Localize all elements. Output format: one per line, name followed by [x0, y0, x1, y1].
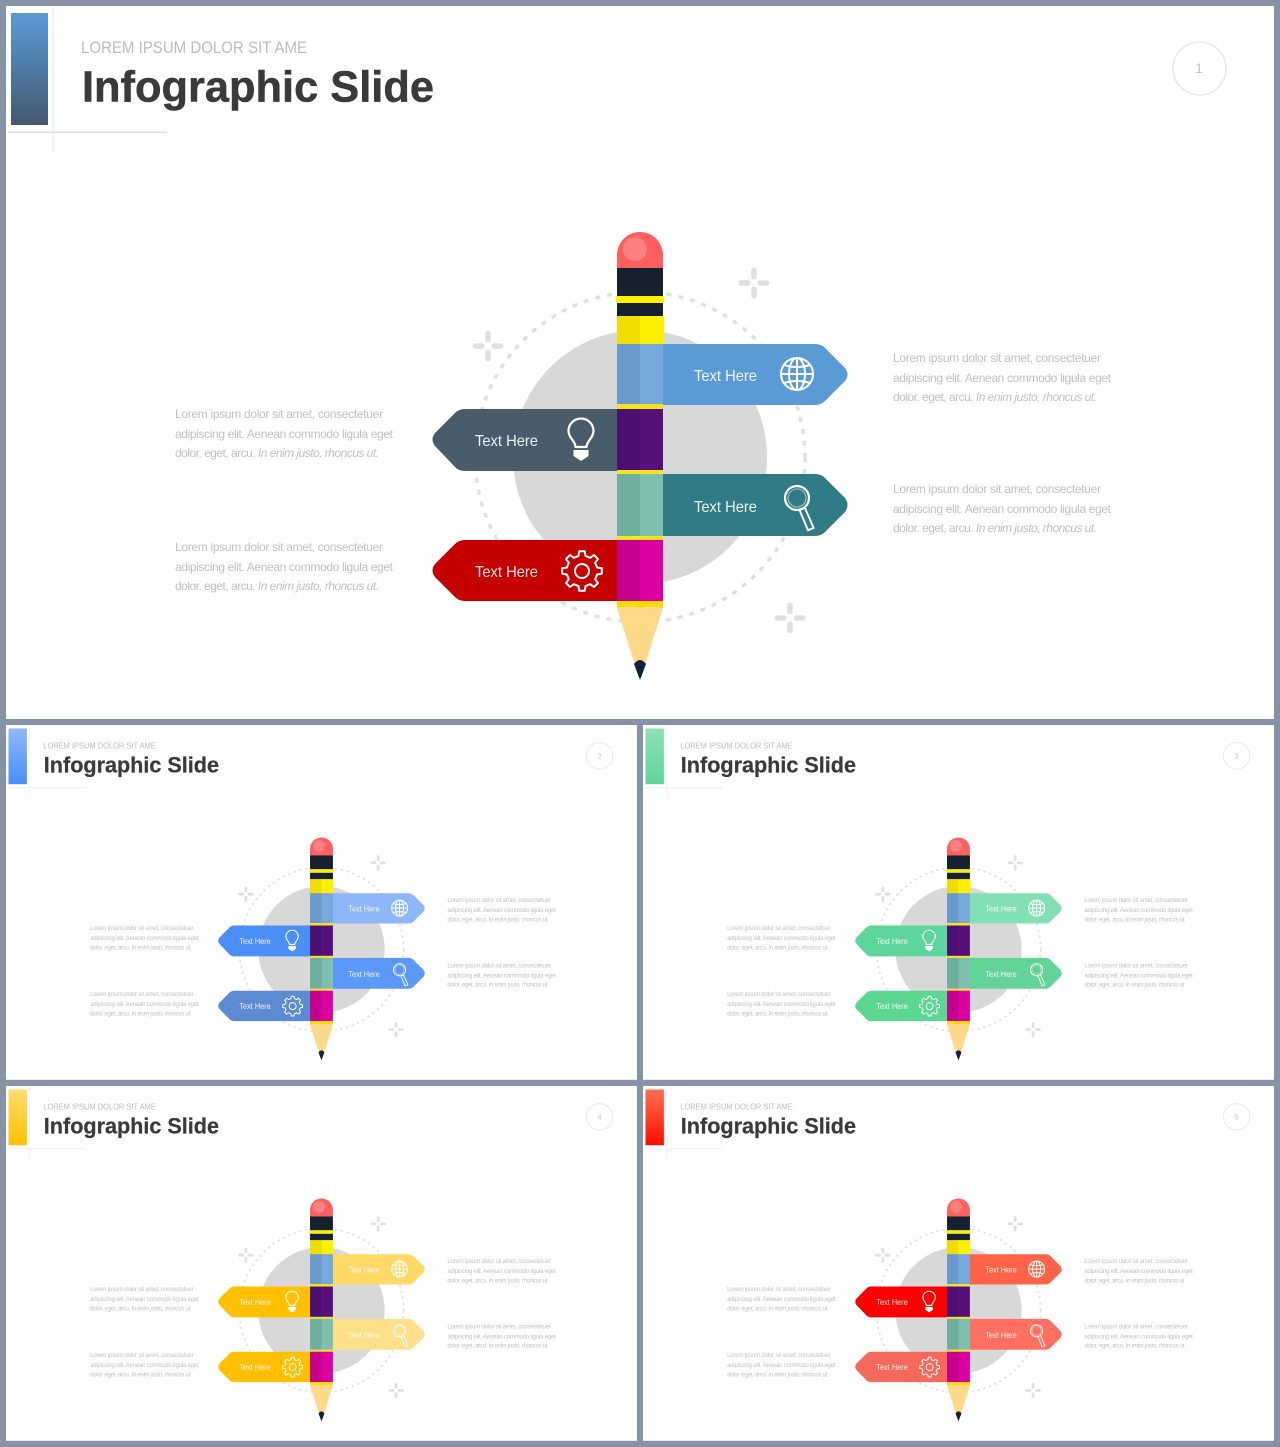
- panel: blue slide 2: [6, 725, 637, 1080]
- text block: lower right: adipiscing elit. Aenean commodo ligula eget: [893, 502, 1112, 516]
- arrow: lower right: [970, 958, 1062, 989]
- pencil: [616, 232, 664, 680]
- arrow: top right: Text Here: [348, 905, 380, 914]
- background circles: [876, 867, 1041, 1032]
- text block: upper right: dolor. eget, arcu. In enim justo, rhoncus ut.: [1084, 918, 1186, 924]
- text block: upper left: adipiscing elit. Aenean commodo ligula eget: [175, 427, 394, 441]
- text block: upper right: adipiscing elit. Aenean commodo ligula eget: [893, 371, 1112, 385]
- text block: upper left: adipiscing elit. Aenean commodo ligula eget: [727, 936, 836, 942]
- text block: upper right: [893, 351, 1112, 404]
- subtitle: LOREM IPSUM DOLOR SIT AME: [680, 741, 793, 750]
- text block: lower right: adipiscing elit. Aenean commodo ligula eget: [1084, 1334, 1193, 1340]
- page number badge: 3: [1235, 753, 1239, 760]
- page number badge: 2: [598, 753, 602, 760]
- text block: upper right: adipiscing elit. Aenean commodo ligula eget: [1084, 1269, 1193, 1275]
- text block: upper left: adipiscing elit. Aenean commodo ligula eget: [90, 1297, 199, 1303]
- arrow: lower right: Text Here: [985, 1331, 1017, 1340]
- text block: upper right: adipiscing elit. Aenean commodo ligula eget: [1084, 908, 1193, 914]
- text block: upper left: dolor. eget, arcu. In enim justo, rhoncus ut.: [727, 1306, 829, 1312]
- arrow: top right: [970, 1254, 1062, 1285]
- pencil: [947, 837, 970, 1060]
- arrow: upper left: [432, 409, 617, 471]
- arrow: lower right: [663, 474, 848, 536]
- arrow: bottom left: Text Here: [239, 1002, 271, 1011]
- icon: plus left: [875, 1247, 891, 1263]
- text block: upper right: [447, 898, 556, 924]
- text block: lower left: adipiscing elit. Aenean commodo ligula eget: [175, 560, 394, 574]
- arrow: bottom left: Text Here: [876, 1363, 908, 1372]
- text block: lower left: Lorem ipsum dolor sit amet, consectetuer: [90, 992, 194, 998]
- text block: upper right: Lorem ipsum dolor sit amet, consectetuer: [447, 898, 551, 904]
- text block: upper left: adipiscing elit. Aenean commodo ligula eget: [727, 1297, 836, 1303]
- subtitle: LOREM IPSUM DOLOR SIT AME: [43, 741, 156, 750]
- arrow: upper left: Text Here: [876, 937, 908, 946]
- text block: upper right: dolor. eget, arcu. In enim justo, rhoncus ut.: [447, 1279, 549, 1285]
- text block: lower right: Lorem ipsum dolor sit amet, consectetuer: [1084, 1324, 1188, 1330]
- text block: lower left: Lorem ipsum dolor sit amet, consectetuer: [727, 1353, 831, 1359]
- text block: lower left: dolor. eget, arcu. In enim justo, rhoncus ut.: [727, 1373, 829, 1379]
- icon: plus top right: [738, 268, 770, 298]
- page number badge: 1: [1195, 60, 1203, 76]
- icon: plus top right: [1007, 855, 1023, 871]
- icon: plus left: [238, 1247, 254, 1263]
- arrow: bottom left: Text Here: [239, 1363, 271, 1372]
- arrow: lower right: Text Here: [694, 499, 757, 516]
- text block: upper left: dolor. eget, arcu. In enim justo, rhoncus ut.: [175, 446, 379, 460]
- arrow: bottom left: [855, 991, 947, 1021]
- subtitle: LOREM IPSUM DOLOR SIT AME: [81, 39, 307, 57]
- page number badge: [1223, 743, 1250, 769]
- panel: red slide 5: [643, 1086, 1274, 1441]
- text block: lower right: Lorem ipsum dolor sit amet, consectetuer: [893, 482, 1101, 496]
- icon: plus top right: [1007, 1216, 1023, 1232]
- subtitle: LOREM IPSUM DOLOR SIT AME: [680, 1102, 793, 1111]
- text block: lower left: [175, 540, 394, 593]
- text block: upper right: Lorem ipsum dolor sit amet, consectetuer: [1084, 1259, 1188, 1265]
- text block: upper left: adipiscing elit. Aenean commodo ligula eget: [90, 936, 199, 942]
- text block: lower right: dolor. eget, arcu. In enim justo, rhoncus ut.: [893, 521, 1097, 535]
- arrow: upper left: Text Here: [239, 937, 271, 946]
- icon: plus top right: [370, 855, 386, 871]
- text block: lower right: Lorem ipsum dolor sit amet, consectetuer: [447, 963, 551, 969]
- text block: upper left: dolor. eget, arcu. In enim justo, rhoncus ut.: [90, 1306, 192, 1312]
- accent bar: [8, 728, 27, 784]
- title: Infographic Slide: [44, 753, 219, 778]
- text block: lower right: adipiscing elit. Aenean commodo ligula eget: [447, 1334, 556, 1340]
- text block: lower right: dolor. eget, arcu. In enim justo, rhoncus ut.: [1084, 1344, 1186, 1350]
- icon: plus left: [472, 330, 504, 362]
- arrow: upper left: [855, 926, 947, 956]
- arrow: bottom left: [855, 1352, 947, 1382]
- text block: lower left: Lorem ipsum dolor sit amet, consectetuer: [727, 992, 831, 998]
- text block: lower left: [727, 992, 836, 1018]
- pencil: [310, 837, 333, 1060]
- page number badge: [1223, 1104, 1250, 1130]
- text block: lower right: [447, 963, 556, 989]
- arrow: bottom left: [218, 991, 310, 1021]
- arrow: bottom left: [218, 1352, 310, 1382]
- text block: lower right: dolor. eget, arcu. In enim justo, rhoncus ut.: [1084, 983, 1186, 989]
- text block: lower right: dolor. eget, arcu. In enim justo, rhoncus ut.: [447, 1344, 549, 1350]
- page number badge: [586, 743, 613, 769]
- text block: lower left: dolor. eget, arcu. In enim justo, rhoncus ut.: [727, 1012, 829, 1018]
- text block: upper left: Lorem ipsum dolor sit amet, consectetuer: [90, 926, 194, 932]
- text block: lower left: Lorem ipsum dolor sit amet, consectetuer: [175, 540, 383, 554]
- icon: plus bottom right: [388, 1022, 404, 1037]
- arrow: top right: Text Here: [985, 905, 1017, 914]
- text block: upper left: Lorem ipsum dolor sit amet, consectetuer: [727, 1287, 831, 1293]
- text block: upper right: dolor. eget, arcu. In enim justo, rhoncus ut.: [447, 918, 549, 924]
- background circles: [239, 867, 404, 1032]
- text block: upper left: [727, 926, 836, 951]
- arrow: top right: [333, 1254, 425, 1285]
- background circles: [239, 1228, 404, 1393]
- icon: plus left: [875, 886, 891, 902]
- text block: lower left: dolor. eget, arcu. In enim justo, rhoncus ut.: [90, 1012, 192, 1018]
- arrow: lower right: [333, 1319, 425, 1350]
- text block: upper right: Lorem ipsum dolor sit amet, consectetuer: [893, 351, 1101, 365]
- accent bar: [8, 1089, 27, 1145]
- text block: upper right: adipiscing elit. Aenean commodo ligula eget: [447, 908, 556, 914]
- arrow: upper left: [218, 1287, 310, 1317]
- arrow: top right: Text Here: [985, 1266, 1017, 1275]
- text block: upper right: dolor. eget, arcu. In enim justo, rhoncus ut.: [893, 390, 1097, 404]
- text block: lower right: adipiscing elit. Aenean commodo ligula eget: [1084, 973, 1193, 979]
- arrow: lower right: Text Here: [348, 970, 380, 979]
- text block: upper left: [175, 407, 394, 460]
- page number badge: 4: [598, 1114, 602, 1121]
- arrow: upper left: Text Here: [876, 1298, 908, 1307]
- text block: lower left: [90, 992, 199, 1018]
- text block: upper left: dolor. eget, arcu. In enim justo, rhoncus ut.: [90, 945, 192, 951]
- text block: upper left: dolor. eget, arcu. In enim justo, rhoncus ut.: [727, 945, 829, 951]
- title: Infographic Slide: [681, 753, 856, 778]
- title: Infographic Slide: [82, 62, 434, 112]
- text block: upper right: dolor. eget, arcu. In enim justo, rhoncus ut.: [1084, 1279, 1186, 1285]
- page number badge: 5: [1235, 1114, 1239, 1121]
- arrow: bottom left: [432, 540, 617, 601]
- text block: lower right: [447, 1324, 556, 1350]
- arrow: top right: [970, 893, 1062, 924]
- arrow: upper left: Text Here: [475, 433, 538, 450]
- icon: plus left: [238, 886, 254, 902]
- title: Infographic Slide: [44, 1114, 219, 1139]
- page number badge: [586, 1104, 613, 1130]
- panel: main slide 1: [6, 6, 1274, 719]
- text block: upper right: adipiscing elit. Aenean commodo ligula eget: [447, 1269, 556, 1275]
- arrow: lower right: [970, 1319, 1062, 1350]
- arrow: upper left: [218, 926, 310, 956]
- arrow: top right: Text Here: [694, 368, 757, 385]
- accent bar: [645, 728, 664, 784]
- text block: lower right: [893, 482, 1112, 535]
- text block: upper right: [447, 1259, 556, 1285]
- accent bar: [645, 1089, 664, 1145]
- arrow: top right: [663, 344, 848, 405]
- text block: upper right: Lorem ipsum dolor sit amet, consectetuer: [447, 1259, 551, 1265]
- text block: upper left: Lorem ipsum dolor sit amet, consectetuer: [727, 926, 831, 932]
- text block: lower right: [1084, 963, 1193, 989]
- panel: yellow slide 4: [6, 1086, 637, 1441]
- text block: upper right: Lorem ipsum dolor sit amet, consectetuer: [1084, 898, 1188, 904]
- icon: plus bottom right: [1025, 1383, 1041, 1398]
- text block: lower right: Lorem ipsum dolor sit amet, consectetuer: [447, 1324, 551, 1330]
- arrow: bottom left: Text Here: [475, 564, 538, 581]
- text block: lower left: Lorem ipsum dolor sit amet, consectetuer: [90, 1353, 194, 1359]
- icon: plus bottom right: [388, 1383, 404, 1398]
- text block: upper left: [90, 926, 199, 951]
- text block: lower right: Lorem ipsum dolor sit amet, consectetuer: [1084, 963, 1188, 969]
- background circles: [876, 1228, 1041, 1393]
- arrow: upper left: Text Here: [239, 1298, 271, 1307]
- text block: lower left: dolor. eget, arcu. In enim justo, rhoncus ut.: [90, 1373, 192, 1379]
- arrow: bottom left: Text Here: [876, 1002, 908, 1011]
- text block: lower left: adipiscing elit. Aenean commodo ligula eget: [90, 1363, 199, 1369]
- pencil: [947, 1198, 970, 1421]
- icon: plus top right: [370, 1216, 386, 1232]
- panel: green slide 3: [643, 725, 1274, 1080]
- text block: lower right: dolor. eget, arcu. In enim justo, rhoncus ut.: [447, 983, 549, 989]
- page number badge: [1173, 42, 1226, 95]
- arrow: top right: [333, 893, 425, 924]
- accent bar: [11, 13, 48, 125]
- arrow: upper left: [855, 1287, 947, 1317]
- text block: lower right: adipiscing elit. Aenean commodo ligula eget: [447, 973, 556, 979]
- text block: lower left: adipiscing elit. Aenean commodo ligula eget: [727, 1363, 836, 1369]
- icon: plus bottom right: [1025, 1022, 1041, 1037]
- text block: lower left: adipiscing elit. Aenean commodo ligula eget: [727, 1002, 836, 1008]
- text block: upper right: [1084, 1259, 1193, 1285]
- icon: plus bottom right: [774, 602, 806, 634]
- arrow: lower right: Text Here: [348, 1331, 380, 1340]
- text block: lower left: adipiscing elit. Aenean commodo ligula eget: [90, 1002, 199, 1008]
- text block: upper left: Lorem ipsum dolor sit amet, consectetuer: [175, 407, 383, 421]
- text block: upper left: [727, 1287, 836, 1312]
- text block: upper left: Lorem ipsum dolor sit amet, consectetuer: [90, 1287, 194, 1293]
- text block: lower right: [1084, 1324, 1193, 1350]
- text block: upper left: [90, 1287, 199, 1312]
- background circles: [475, 292, 805, 622]
- text block: lower left: dolor. eget, arcu. In enim justo, rhoncus ut.: [175, 579, 379, 593]
- text block: upper right: [1084, 898, 1193, 924]
- text block: lower left: [90, 1353, 199, 1379]
- subtitle: LOREM IPSUM DOLOR SIT AME: [43, 1102, 156, 1111]
- arrow: lower right: [333, 958, 425, 989]
- text block: lower left: [727, 1353, 836, 1379]
- title: Infographic Slide: [681, 1114, 856, 1139]
- arrow: lower right: Text Here: [985, 970, 1017, 979]
- pencil: [310, 1198, 333, 1421]
- arrow: top right: Text Here: [348, 1266, 380, 1275]
